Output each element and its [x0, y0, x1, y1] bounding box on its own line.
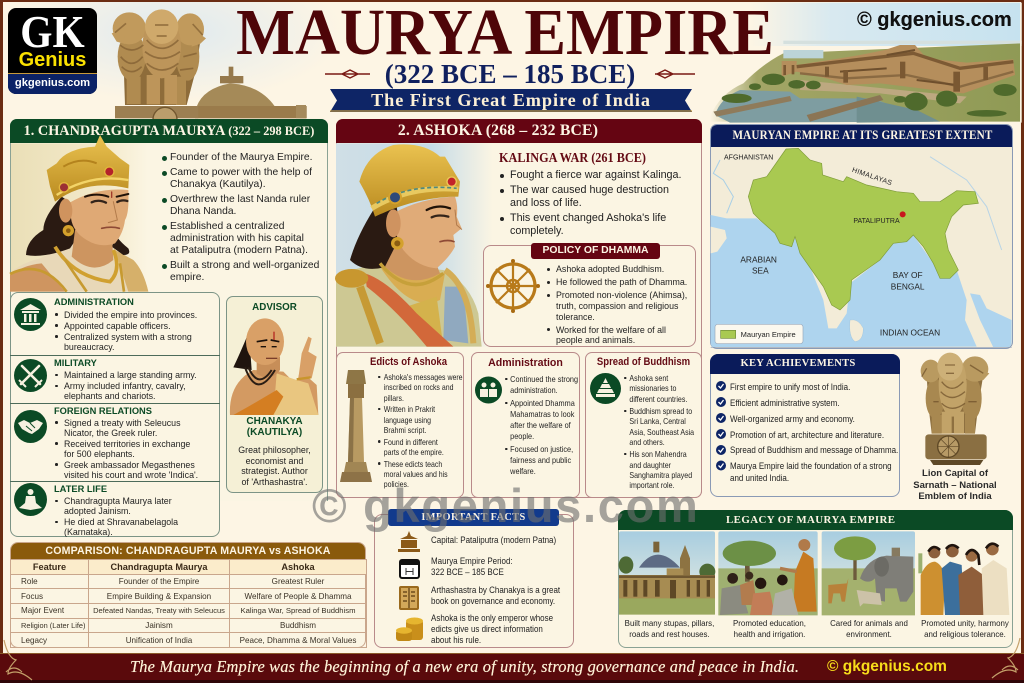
- icon: crossed swords: [14, 359, 47, 392]
- text: Maurya Empire laid the foundation of a strong: [730, 461, 892, 471]
- text: pillars.: [384, 393, 404, 403]
- comparison table: Defeated Nandas, Treaty with Seleucus: [93, 606, 225, 615]
- text: facts: Maurya Empire Period:: [431, 556, 513, 566]
- text: administration: bureaucracy.: [64, 342, 114, 352]
- comparison table: Role: [21, 577, 38, 586]
- heading: LEGACY OF MAURYA EMPIRE: [726, 514, 895, 526]
- portrait: Ashoka: [335, 143, 484, 347]
- text: inscribed on rocks and: [384, 382, 453, 392]
- icon: stupa: [590, 373, 621, 404]
- text: Promotion of art, architecture and literature.: [730, 430, 884, 440]
- caption: unity: Promoted unity, harmony: [921, 618, 1009, 628]
- text: First empire to unify most of India.: [730, 382, 850, 392]
- heading: [710, 354, 900, 374]
- text: Chanakya description: economist and: [246, 456, 303, 466]
- text: Kalinga war: The war caused huge destruction: [510, 184, 669, 196]
- empire territory: [748, 148, 978, 310]
- heading: Administration: [488, 357, 563, 369]
- text: administration: Appointed capable officers.: [64, 321, 171, 331]
- text: later life: [55, 496, 178, 537]
- heading: policy of Dhamma: [531, 243, 660, 259]
- text: and others.: [629, 437, 665, 447]
- text: Well-organized army and economy.: [730, 414, 855, 424]
- caption: stupas: Built many stupas, pillars,: [625, 618, 714, 628]
- text: different countries.: [629, 394, 687, 404]
- panel: Spread of Buddhism: [585, 352, 702, 498]
- text: facts: Ashoka is the only emperor whose: [431, 613, 553, 623]
- text: Ashoka sent: [629, 373, 668, 383]
- text: Chandragupta facts: Founder of the Maurya Empire.: [170, 152, 313, 163]
- text: These edicts teach: [384, 459, 442, 469]
- logo: [8, 8, 97, 94]
- heading: foreign relations: FOREIGN RELATIONS: [54, 406, 152, 416]
- text: Chandragupta facts: Came to power with the help of: [170, 167, 312, 178]
- icon: meditating figure: [14, 483, 47, 516]
- icon: handshake: [14, 410, 47, 443]
- icon: calendar: [399, 559, 420, 579]
- text: Chandragupta facts: Chanakya (Kautilya).: [170, 179, 266, 190]
- illustration: Lion Capital of Sarnath: [920, 352, 990, 465]
- text: [505, 374, 578, 476]
- logo url: gkgenius.com: [15, 77, 90, 89]
- comparison table: Legacy: [21, 636, 47, 645]
- caption: lion capital: Emblem of India: [918, 491, 992, 502]
- caption: unity: [921, 618, 1009, 640]
- text: moral values and his: [384, 469, 448, 479]
- comparison table: Unification of India: [126, 636, 192, 645]
- row: military: [10, 356, 220, 404]
- watermark: © gkgenius.com: [312, 479, 700, 532]
- text: later life: (Karnataka).: [64, 527, 113, 537]
- caption: stupas: [625, 618, 714, 639]
- text: foreign relations: Nicator, the Greek ruler.: [64, 428, 157, 438]
- text: foreign relations: Greek ambassador Megasthenes: [64, 460, 195, 470]
- text: [378, 372, 463, 489]
- text: Dhamma: tolerance.: [556, 312, 595, 322]
- text: administration: [55, 310, 197, 352]
- text: facts: edicts give us direct information: [431, 624, 543, 634]
- text: Kalinga war: [500, 169, 682, 237]
- text: Dhamma: Worked for the welfare of all: [556, 325, 666, 335]
- panel: policy of Dhamma: [483, 245, 696, 347]
- corner ornament left: [2, 638, 36, 682]
- footer url: © gkgenius.com: [827, 658, 947, 675]
- caption: animals: Cared for animals and: [830, 618, 908, 628]
- text: administration: Divided the empire into provinces.: [64, 310, 197, 320]
- heading: important facts: [388, 509, 559, 526]
- heading: Edicts of Ashoka: [370, 356, 447, 368]
- table heading: COMPARISON: CHANDRAGUPTA MAURYA vs ASHOKA: [45, 545, 331, 557]
- text: important role.: [629, 480, 675, 490]
- text: Kalinga war: Fought a fierce war against Kalinga.: [510, 169, 682, 181]
- map: BENGAL: [891, 281, 925, 291]
- text: people.: [510, 431, 534, 441]
- icon: coins: [396, 618, 423, 641]
- comparison table: Greatest Ruler: [272, 577, 324, 586]
- text: missionaries to: [629, 383, 676, 393]
- panel: Administration: [471, 352, 580, 498]
- text: Brahmi script.: [384, 425, 426, 435]
- check icons: [716, 381, 726, 470]
- text: foreign relations: for 500 elephants.: [64, 448, 135, 458]
- map: SEA: [752, 265, 769, 275]
- header sky and palace illustration: [713, 2, 1022, 123]
- text: [730, 382, 898, 483]
- text: Kalinga war: and loss of life.: [510, 197, 582, 209]
- icon: temple: [14, 298, 47, 331]
- caption: stupas: roads and rest houses.: [629, 629, 710, 639]
- comparison table: Empire Building & Expansion: [107, 592, 211, 601]
- map legend: Mauryan Empire: [741, 330, 796, 339]
- scene: people: [918, 543, 1009, 615]
- text: Written in Prakrit: [384, 404, 435, 414]
- caption: animals: environment.: [846, 629, 892, 639]
- text: military: Maintained a large standing army.: [64, 370, 197, 380]
- text: Appointed Dhamma: [510, 398, 575, 408]
- map label Afghanistan: AFGHANISTAN: [724, 155, 773, 162]
- subtitle dates: (322 BCE – 185 BCE): [385, 59, 635, 89]
- map legend: [715, 324, 803, 344]
- panel: advisor: [226, 296, 323, 493]
- text: and united India.: [730, 473, 789, 483]
- map heading: [712, 124, 1013, 147]
- corner ornament right: [990, 636, 1022, 680]
- text: Dhamma: truth, compassion and religious: [556, 301, 678, 311]
- panel: legacy of Maurya Empire: [618, 510, 1013, 648]
- panel: important facts: [374, 514, 574, 648]
- ribbon: The First Great Empire of India: [371, 90, 651, 110]
- text: Chanakya description: of 'Arthashastra'.: [241, 477, 308, 487]
- caption: education: health and irrigation.: [734, 629, 805, 639]
- text: Sri Lanka, Central: [629, 416, 686, 426]
- scene: education: [718, 531, 818, 615]
- logo url: [8, 73, 97, 94]
- text: Chanakya description: Great philosopher,: [238, 445, 311, 455]
- text: His son Mahendra: [629, 449, 687, 459]
- text: Asia, Southeast Asia: [629, 427, 694, 437]
- text: Continued the strong: [510, 374, 578, 384]
- footer statement: The Maurya Empire was the beginning of a new era of unity, strong governance and peace in India.: [130, 657, 799, 676]
- caption: lion capital: Sarnath – National: [913, 480, 997, 491]
- heading: later life: LATER LIFE: [54, 484, 107, 494]
- scene: stupa: [619, 531, 715, 615]
- icon: dharma wheel: [486, 259, 540, 313]
- portrait: Chandragupta: [10, 135, 148, 292]
- text: Focused on justice,: [510, 444, 573, 454]
- icon: book: [399, 586, 419, 610]
- table heading: [10, 542, 366, 560]
- name: Chanakya: (KAUTILYA): [247, 427, 302, 438]
- text: military: Army included infantry, cavalry,: [64, 381, 186, 391]
- text: foreign relations: Signed a treaty with Seleucus: [64, 418, 181, 428]
- heading: military: MILITARY: [54, 358, 97, 368]
- text: Efficient administrative system.: [730, 398, 840, 408]
- text: administration: Centralized system with a strong: [64, 332, 192, 342]
- map: [710, 148, 1012, 348]
- illustrations: legacy scenes: [700, 345, 1024, 683]
- text: parts of the empire.: [384, 447, 444, 457]
- panel heading: [336, 119, 702, 143]
- text: policies.: [384, 479, 409, 489]
- text: foreign relations: [55, 418, 198, 480]
- map label Indian Ocean: INDIAN OCEAN: [880, 327, 940, 337]
- ornaments beside dates: [325, 69, 695, 79]
- panel: Edicts of Ashoka: [336, 352, 464, 498]
- text: Dhamma: Ashoka adopted Buddhism.: [556, 264, 664, 274]
- illustration: pillar: [340, 370, 372, 482]
- panel: comparison table: [10, 542, 366, 648]
- text: Mahamatras to look: [510, 409, 574, 419]
- text: facts: 322 BCE – 185 BCE: [431, 567, 504, 577]
- text: Chanakya description: [238, 445, 311, 487]
- map label Arabian Sea: ARABIAN: [740, 254, 777, 264]
- comparison table: Feature: [33, 562, 66, 572]
- text: foreign relations: Received territories in exchange: [64, 438, 190, 448]
- text: military: [55, 370, 197, 401]
- text: Sanghamitra played: [629, 470, 692, 480]
- logo Genius: Genius: [19, 49, 86, 71]
- scene: animals: [822, 531, 915, 615]
- text: Chanakya description: strategist. Author: [241, 466, 308, 476]
- text: Chandragupta facts: [162, 152, 319, 283]
- text: language using: [384, 415, 431, 425]
- text: later life: He died at Shravanabelagola: [64, 517, 178, 527]
- text: Dhamma: He followed the path of Dhamma.: [556, 277, 687, 287]
- text: Chandragupta facts: at Pataliputra (modern Patna).: [170, 245, 308, 256]
- panel: key achievements: [710, 354, 900, 497]
- text: and daughter: [629, 460, 671, 470]
- row: foreign relations: [10, 404, 220, 482]
- text: Buddhism spread to: [629, 406, 692, 416]
- heading: advisor: ADVISOR: [252, 302, 297, 313]
- panel heading: [10, 119, 328, 143]
- text: Chandragupta facts: Built a strong and well-organized: [170, 260, 319, 271]
- text: Kalinga war: completely.: [510, 225, 564, 237]
- panel: map of Mauryan Empire: [710, 124, 1013, 349]
- comparison table: Major Event: [21, 606, 64, 615]
- sea: [711, 215, 977, 347]
- row: administration: [10, 292, 220, 356]
- comparison table: Peace, Dhamma & Moral Values: [240, 636, 356, 645]
- text: later life: Chandragupta Maurya later: [64, 496, 172, 506]
- comparison table: Welfare of People & Dhamma: [245, 592, 351, 601]
- text: welfare.: [510, 466, 536, 476]
- text: Dhamma: people and animals.: [556, 335, 635, 345]
- panel: Ashoka: [336, 119, 702, 498]
- row: later life: [14, 483, 178, 537]
- caption: education: Promoted education,: [733, 618, 806, 628]
- panel: administration, military, foreign relations, later life: [10, 292, 220, 537]
- text: military: elephants and chariots.: [64, 391, 155, 401]
- heading text: 2. ASHOKA (268 – 232 BCE): [398, 122, 598, 139]
- comparison table: Ashoka: [281, 562, 315, 572]
- text: facts: about his rule.: [431, 635, 481, 645]
- caption: unity: and religious tolerance.: [924, 629, 1006, 639]
- comparison table: Kalinga War, Spread of Buddhism: [240, 606, 356, 615]
- comparison table: [10, 559, 367, 648]
- map heading: MAURYAN EMPIRE AT ITS GREATEST EXTENT: [732, 128, 993, 142]
- text: fairness and public: [510, 455, 571, 465]
- heading: important facts: IMPORTANT FACTS: [421, 512, 526, 523]
- text: Dhamma: Promoted non-violence (Ahimsa),: [556, 290, 687, 300]
- heading: [618, 510, 1013, 530]
- text: Chandragupta facts: Dhana Nanda.: [170, 206, 236, 217]
- portrait: Chanakya: [230, 318, 318, 415]
- caption: lion capital: Lion Capital of: [922, 468, 988, 479]
- caption: education: [723, 618, 816, 640]
- name: Chanakya: CHANAKYA: [246, 416, 303, 427]
- comparison table: Founder of the Empire: [119, 577, 199, 586]
- ribbon: [330, 89, 692, 112]
- text: administration.: [510, 385, 558, 395]
- text: Spread of Buddhism and message of Dhamma.: [730, 445, 898, 455]
- comparison table: Focus: [21, 592, 43, 601]
- text: Chandragupta facts: Established a centralized: [170, 221, 284, 232]
- footer banner: [0, 653, 1024, 683]
- text: facts: Arthashastra by Chanakya is a great: [431, 585, 560, 595]
- panel heading: 1. CHANDRAGUPTA MAURYA (322 – 298 BCE): [24, 123, 314, 139]
- heading: administration: ADMINISTRATION: [54, 297, 134, 307]
- heading: policy of Dhamma: POLICY OF DHAMMA: [542, 245, 649, 256]
- text: [624, 373, 694, 490]
- text: after the welfare of: [510, 420, 571, 430]
- comparison table: Religion (Later Life): [21, 621, 86, 630]
- text: Chandragupta facts: empire.: [170, 272, 204, 283]
- text: facts: Capital: Pataliputra (modern Patna): [431, 535, 556, 545]
- text: Dhamma: [547, 264, 687, 345]
- text: facts: book on governance and economy.: [431, 596, 555, 606]
- panel: Chandragupta Maurya: [10, 119, 328, 501]
- map label Pataliputra: PATALIPUTRA: [853, 218, 900, 225]
- text: Chandragupta facts: administration with his capital: [170, 233, 304, 244]
- text: Ashoka's messages were: [384, 372, 463, 382]
- text: Kalinga war: This event changed Ashoka's life: [510, 212, 666, 224]
- comparison table: Chandragupta Maurya: [110, 562, 208, 572]
- watermark top right: © gkgenius.com: [857, 9, 1012, 31]
- heading: KEY ACHIEVEMENTS: [741, 358, 855, 369]
- illustration: lion capital and stupa: [112, 9, 307, 119]
- text: later life: adopted Jainism.: [64, 506, 131, 516]
- caption: lion capital: [913, 468, 997, 502]
- comparison table: Buddhism: [280, 621, 316, 630]
- caption: animals: [825, 618, 913, 640]
- map label Bay of Bengal: BAY OF: [893, 270, 923, 280]
- heading: Spread of Buddhism: [597, 356, 690, 368]
- heading: Kalinga war: KALINGA WAR (261 BCE): [499, 150, 646, 165]
- icon: officials: [475, 376, 502, 404]
- text: foreign relations: visited his court and wrote 'Indica'.: [64, 470, 198, 480]
- map label Himalayas: HIMALAYAS: [851, 167, 893, 187]
- text: Chandragupta facts: Overthrew the last Nanda ruler: [170, 194, 310, 205]
- name: Chanakya: [246, 416, 303, 438]
- text: Found in different: [384, 437, 438, 447]
- text: facts: [431, 535, 560, 645]
- icon: temple: [398, 531, 420, 552]
- comparison table: Jainism: [145, 621, 173, 630]
